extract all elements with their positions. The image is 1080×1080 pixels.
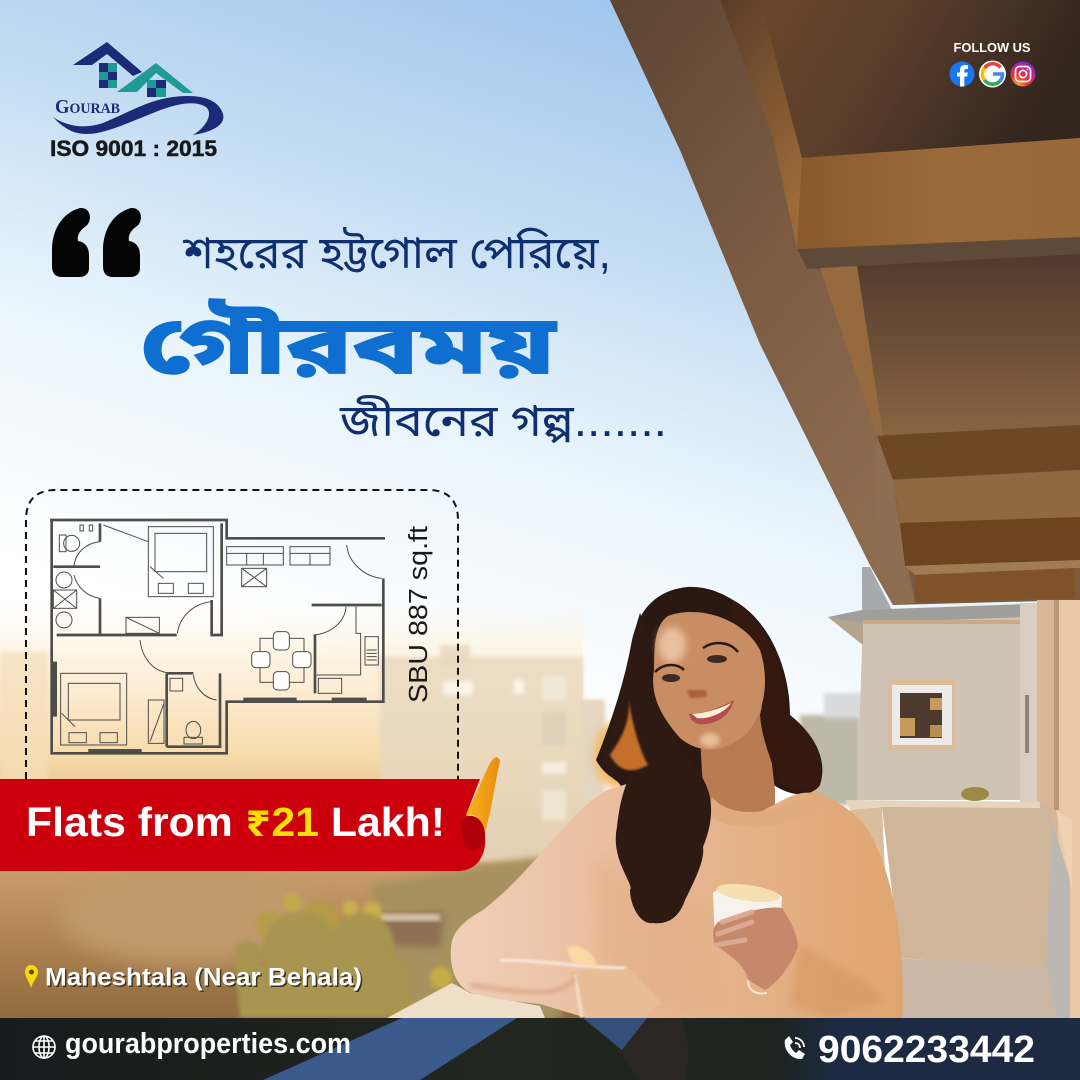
interior walls — [53, 523, 382, 751]
balcony ceiling and beams — [610, 0, 1080, 605]
woman with coffee cup — [451, 587, 903, 1020]
website: gourabproperties.com — [65, 1028, 351, 1060]
bed top room — [103, 525, 213, 597]
hand — [713, 907, 798, 990]
location — [25, 964, 364, 993]
woman sleeve under band — [590, 1018, 688, 1080]
phone number: 9062233442 — [818, 1029, 1035, 1071]
navy roof — [73, 42, 142, 76]
glow behind hair — [594, 721, 642, 789]
beam three — [900, 517, 1080, 566]
strip beside beam — [720, 0, 802, 249]
bathrooms — [53, 525, 202, 744]
face — [653, 612, 765, 749]
logo: Gourab ISO 9001 — [50, 42, 223, 161]
teal roof — [117, 63, 193, 93]
light between arm and body — [567, 946, 596, 968]
kitchen — [317, 607, 378, 693]
parapet — [845, 800, 1052, 970]
top ceiling — [720, 0, 1080, 158]
dining table — [252, 632, 311, 690]
swoosh — [53, 96, 223, 135]
floor plan panel dashed frame — [26, 490, 458, 779]
ground and road — [370, 858, 590, 1020]
brand name: GOURAB — [55, 96, 120, 118]
sofas — [227, 547, 330, 587]
sleeve cuff and folds — [570, 967, 662, 1020]
floor — [895, 958, 1058, 1020]
icon: map pin — [25, 965, 38, 988]
window — [888, 680, 955, 750]
quote mark — [52, 208, 141, 277]
back hair — [596, 587, 822, 830]
ribbon curl — [461, 816, 485, 850]
floor plan — [50, 520, 385, 753]
price banner — [0, 757, 500, 871]
price text: Flats from ₹21 Lakh! — [26, 799, 445, 845]
ISO text: ISO 9001 : 2015 — [50, 136, 217, 161]
eave — [828, 604, 1027, 645]
icon: google — [979, 60, 1006, 88]
red ribbon — [0, 779, 485, 871]
bed lower room — [61, 673, 127, 745]
follow label: FOLLOW US — [954, 41, 1030, 55]
balcony rail — [387, 983, 545, 1018]
second ceiling — [857, 254, 1080, 435]
icon: instagram — [1010, 62, 1036, 86]
follow us and social icons — [950, 41, 1036, 88]
blue triangle middle — [583, 1018, 647, 1050]
smile — [689, 700, 734, 724]
beam four — [915, 568, 1075, 602]
background: hazy city and ground — [0, 600, 864, 1020]
bracelet cuff — [748, 980, 767, 993]
collar — [705, 790, 830, 827]
grey upper block — [862, 567, 892, 610]
location text: Maheshtala (Near Behala) — [45, 964, 362, 992]
blue triangle left — [263, 1018, 517, 1080]
front hair — [600, 613, 711, 923]
icon: facebook — [950, 62, 974, 86]
area label: SBU 887 sq.ft — [405, 526, 433, 703]
outer walls — [50, 520, 385, 753]
door swings — [74, 542, 382, 700]
neck — [700, 705, 775, 828]
headline line two: গৌরবময় — [140, 299, 557, 391]
dark band — [0, 1018, 1080, 1080]
headline line three: জীবনের গল্প....... — [339, 395, 667, 446]
distant buildings — [0, 645, 864, 862]
footer bar — [0, 1018, 1080, 1080]
sweater — [451, 780, 903, 1019]
fascia — [610, 0, 915, 605]
cup — [713, 885, 782, 950]
beam two — [877, 425, 1080, 480]
icon: globe — [33, 1036, 55, 1058]
tree — [234, 893, 452, 1018]
side wall and pillars — [1020, 603, 1043, 803]
curl cone — [465, 757, 500, 833]
sweater shading — [590, 860, 720, 1015]
neighbouring wall with window and balcony — [828, 567, 1080, 1020]
window squares — [99, 63, 166, 97]
location text shadow: Maheshtala (Near Behala) — [46, 965, 364, 993]
eyes and brows — [655, 665, 684, 672]
plant — [961, 787, 989, 801]
headline line one: শহরের হট্টগোল পেরিয়ে, — [182, 227, 611, 278]
icon: phone — [785, 1036, 805, 1059]
beam one — [797, 138, 1080, 249]
wall — [857, 615, 1025, 800]
ceiling base — [610, 0, 1080, 605]
